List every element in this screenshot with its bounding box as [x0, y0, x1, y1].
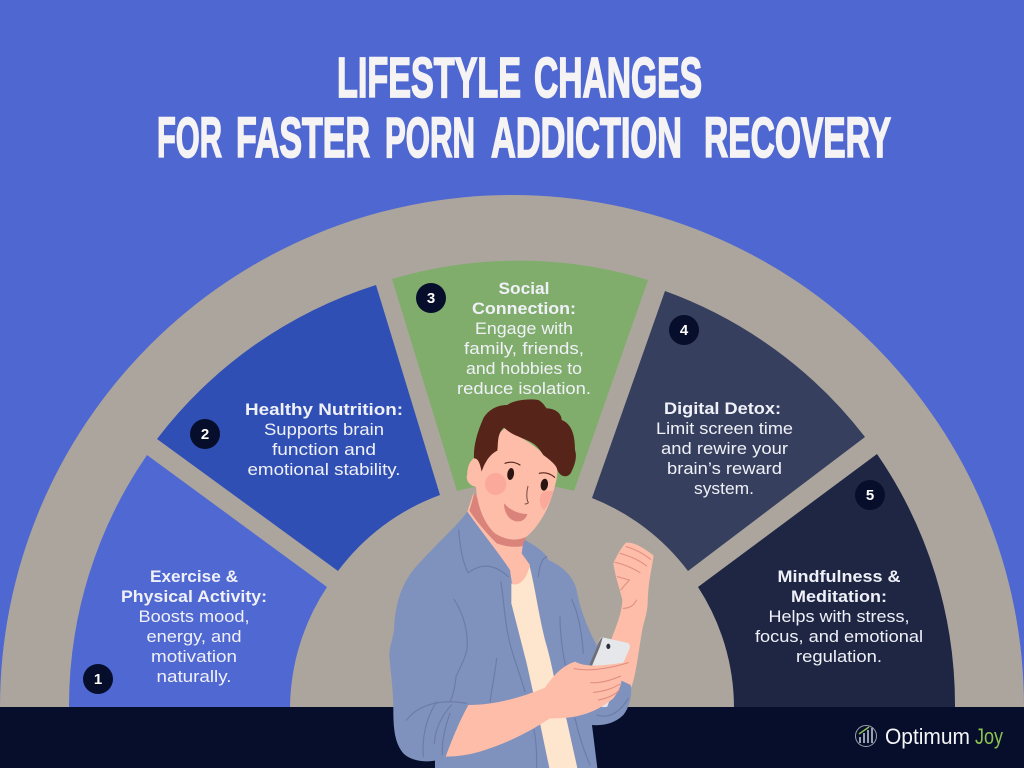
holding hand and forearm [446, 662, 630, 757]
text: social: Connection: [472, 300, 576, 318]
cheeks [485, 473, 506, 495]
panel: social connection [392, 261, 648, 491]
text: mindfulness: focus, and emotional [755, 628, 923, 646]
text: mindfulness: Meditation: [791, 588, 887, 606]
text: mindfulness: Mindfulness & [778, 568, 901, 586]
shirt [389, 512, 631, 768]
badge 1: 1 [94, 671, 102, 688]
text: mindfulness: regulation. [796, 648, 882, 666]
text: exercise: energy, and [146, 628, 242, 646]
text: mindfulness [755, 568, 923, 666]
panel: exercise and physical activity [69, 455, 327, 707]
badge 2 [190, 419, 220, 449]
eyes [507, 468, 515, 480]
text: exercise [121, 568, 267, 686]
text: exercise: Exercise & [150, 568, 238, 586]
text: exercise: Physical Activity: [121, 588, 267, 606]
text: nutrition: emotional stability. [248, 461, 400, 479]
text: detox: Limit screen time [656, 420, 793, 438]
title: RECOVERY [704, 106, 891, 169]
text: detox: Digital Detox: [664, 400, 781, 418]
text: exercise: Boosts mood, [138, 608, 250, 626]
text: social [457, 280, 591, 398]
text: nutrition [245, 401, 403, 479]
badge 5: 5 [866, 487, 874, 504]
title: ADDICTION [491, 106, 682, 169]
badge 4 [669, 315, 699, 345]
ear [467, 456, 483, 487]
panel: digital detox [592, 291, 865, 571]
footer band [0, 707, 1024, 768]
finger lines [574, 663, 628, 700]
shirt fold lines [407, 530, 628, 768]
text: mindfulness: Helps with stress, [768, 608, 910, 626]
title: FASTER [236, 106, 370, 169]
text: social: reduce isolation. [457, 380, 591, 398]
neck shadow [469, 493, 527, 547]
text: nutrition: Healthy Nutrition: [245, 401, 403, 419]
title: PORN [385, 106, 475, 169]
text: social: Engage with [475, 320, 573, 338]
panel: mindfulness and meditation [698, 454, 955, 707]
illustration: man with phone [389, 399, 654, 768]
text: exercise: motivation [151, 648, 237, 666]
title: FOR [157, 106, 222, 169]
logo icon [856, 726, 876, 746]
logo: Joy [975, 724, 1004, 749]
badge 3: 3 [427, 290, 435, 307]
text: detox: brain’s reward [667, 460, 782, 478]
text: social: family, friends, [464, 340, 584, 358]
mouth [504, 503, 527, 521]
text: nutrition: function and [272, 441, 376, 459]
text: social: Social [498, 280, 550, 298]
badge 3 [416, 283, 446, 313]
logo [856, 724, 1004, 749]
title [157, 46, 891, 169]
phone [588, 637, 630, 707]
text: nutrition: Supports brain [264, 421, 384, 439]
text: social: and hobbies to [466, 360, 582, 378]
brows [505, 462, 555, 477]
text: detox [656, 400, 793, 498]
hair [474, 399, 576, 476]
badge 1 [83, 664, 113, 694]
face [476, 428, 557, 540]
text: exercise: naturally. [156, 668, 232, 686]
logo text: Optimum [885, 724, 970, 749]
badge 2: 2 [201, 426, 209, 443]
panel: healthy nutrition [157, 285, 440, 571]
nose [525, 486, 528, 504]
text: detox: system. [694, 480, 754, 498]
title: LIFESTYLE [337, 46, 521, 109]
semicircle backdrop [0, 195, 1024, 707]
title: CHANGES [534, 46, 702, 109]
fist lines [615, 547, 651, 608]
badge 5 [855, 480, 885, 510]
neck [467, 493, 530, 584]
text: detox: and rewire your [661, 440, 789, 458]
t-shirt [511, 565, 577, 768]
raised arm and fist [607, 543, 654, 702]
badge 4: 4 [680, 322, 689, 339]
